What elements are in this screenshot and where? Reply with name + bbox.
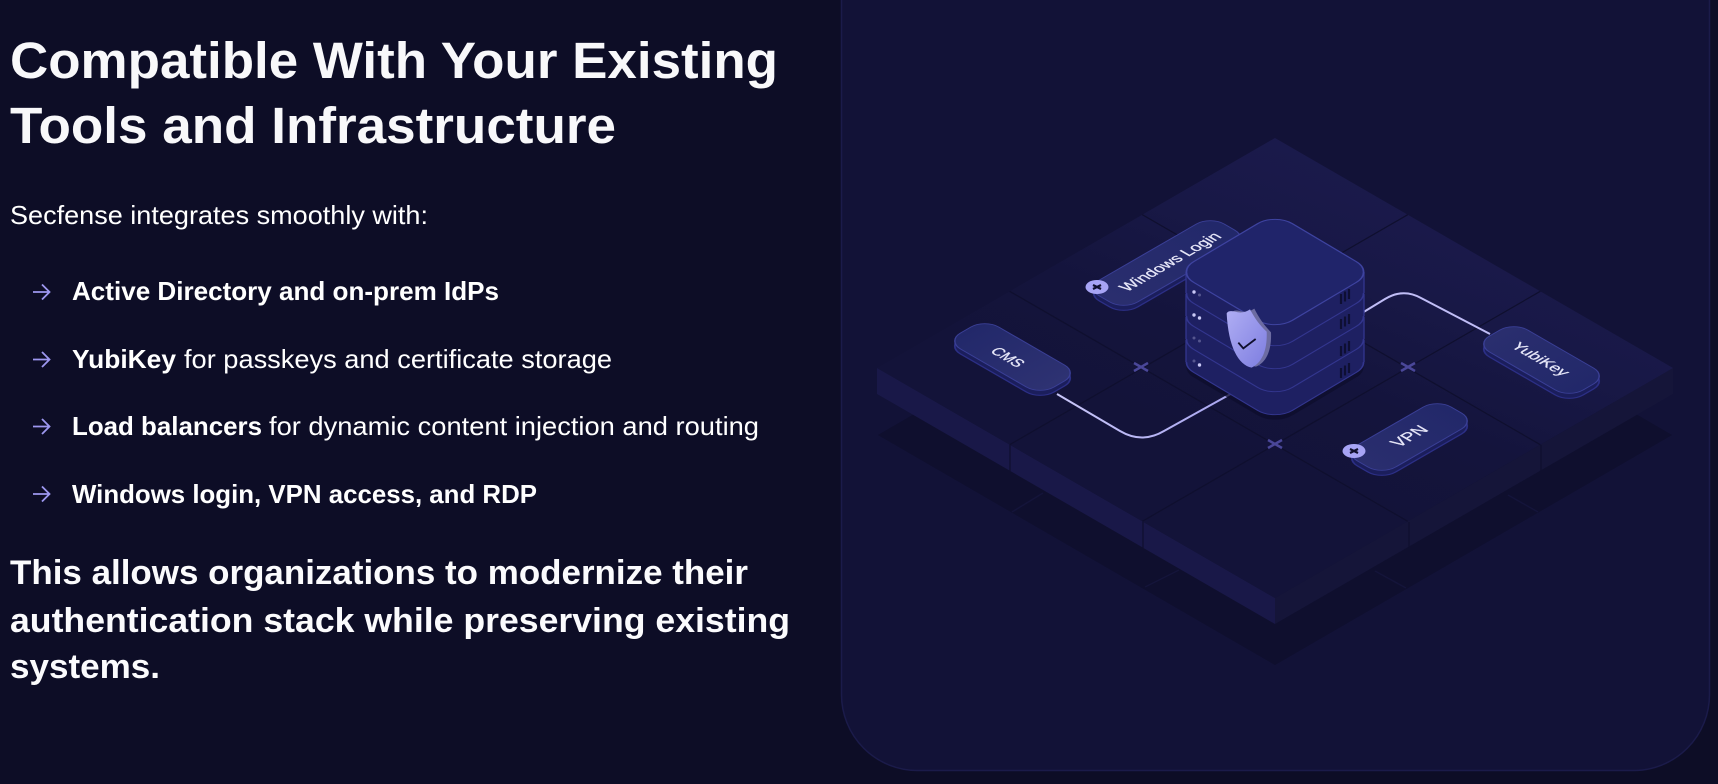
pill: VPN: VPN bbox=[1386, 423, 1433, 450]
heading: Tools and Infrastructure bbox=[10, 97, 616, 154]
status lights bbox=[1192, 290, 1201, 367]
server layer 4 bbox=[1176, 303, 1374, 421]
closing statement: systems. bbox=[10, 648, 160, 686]
icon: status badge bbox=[1086, 280, 1108, 294]
list item: YubiKey: YubiKey bbox=[72, 344, 177, 374]
list item: Load balancers: for dynamic content injection and routing bbox=[269, 411, 759, 441]
list item: Windows login: Windows login, VPN access, and RDP bbox=[72, 479, 537, 509]
heading bbox=[10, 32, 778, 154]
server layer 1 bbox=[1176, 234, 1374, 352]
platform left side bbox=[877, 368, 1275, 624]
icon: security shield bbox=[1227, 309, 1271, 368]
list item: YubiKey: for passkeys and certificate storage bbox=[184, 344, 612, 374]
pill: CMS bbox=[947, 319, 1078, 400]
closing statement bbox=[10, 554, 790, 686]
integration list bbox=[33, 276, 759, 509]
platform shadow bbox=[878, 205, 1672, 665]
list item: Load balancers: Load balancers bbox=[72, 411, 262, 441]
pill: Windows Login bbox=[1086, 216, 1248, 315]
isometric illustration bbox=[877, 138, 1673, 665]
icon: status badge bbox=[1342, 444, 1366, 458]
pill: YubiKey bbox=[1476, 322, 1607, 403]
connector wires bbox=[1057, 293, 1490, 438]
pill: Windows Login: Windows Login bbox=[1116, 230, 1226, 294]
list item: Active Directory: Active Directory and on-prem IdPs bbox=[72, 276, 499, 306]
platform top bbox=[877, 138, 1673, 598]
pill: VPN bbox=[1342, 399, 1475, 480]
list item: Load balancers bbox=[33, 411, 759, 441]
pill: YubiKey: YubiKey bbox=[1507, 340, 1574, 379]
server layer 2 bbox=[1176, 257, 1374, 375]
heading: Compatible With Your Existing bbox=[10, 32, 778, 89]
server top surface bbox=[1176, 213, 1374, 331]
closing statement: This allows organizations to modernize their bbox=[10, 554, 748, 592]
server layer 3 bbox=[1176, 280, 1374, 398]
closing statement: authentication stack while preserving existing bbox=[10, 602, 790, 640]
server shadow bbox=[1176, 308, 1374, 426]
platform bbox=[877, 138, 1673, 624]
grid cross markers bbox=[1134, 363, 1415, 448]
platform right side bbox=[1275, 368, 1673, 624]
pill: CMS: CMS bbox=[986, 345, 1028, 370]
intro text: Secfense integrates smoothly with: bbox=[10, 200, 428, 230]
server stack bbox=[1176, 213, 1374, 426]
panel: illustration card bbox=[842, 0, 1710, 770]
vents bbox=[1341, 289, 1349, 378]
